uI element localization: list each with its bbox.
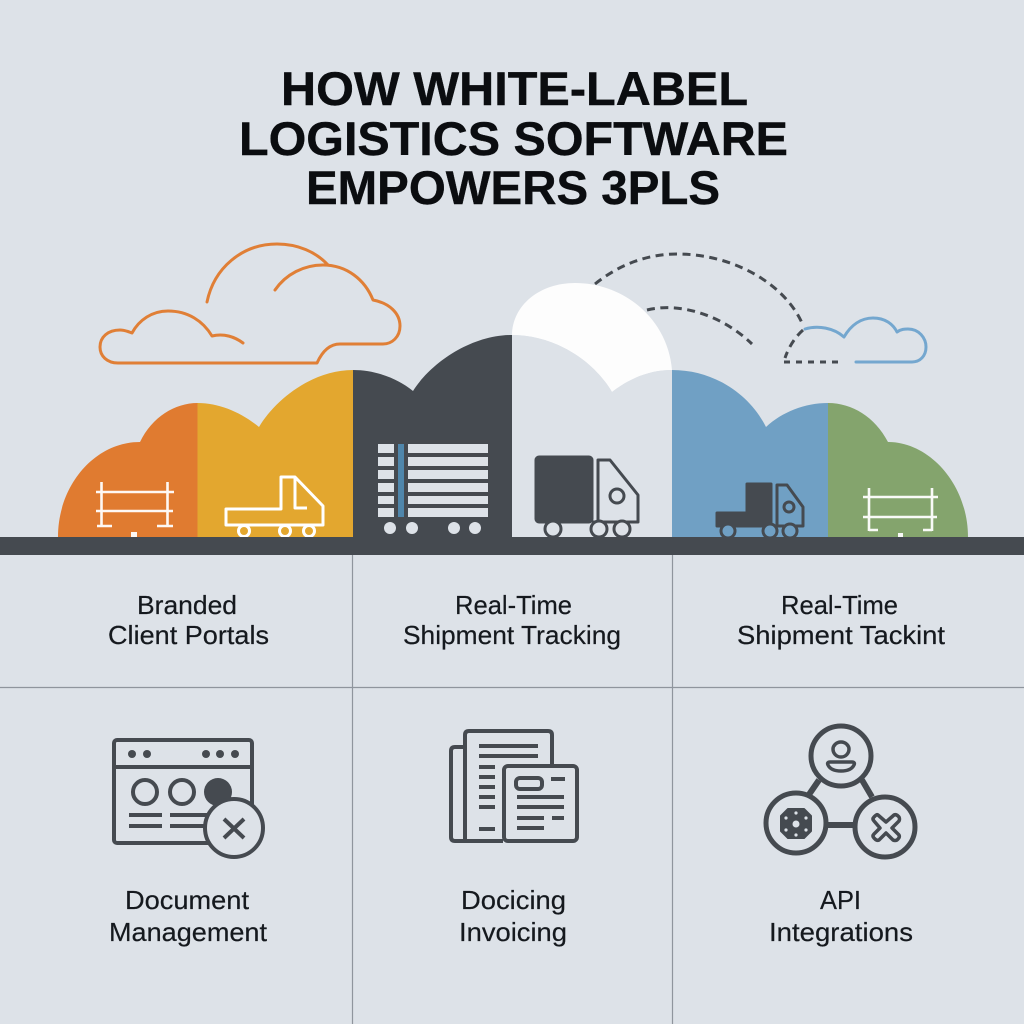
label: real-time shipment tracking: Shipment Tracking [403, 620, 621, 650]
dashed connection arcs [595, 254, 838, 362]
label: branded client portals: Client Portals [108, 620, 269, 650]
icon: striped container on wheels [378, 444, 488, 534]
orange outline cloud [100, 244, 400, 363]
grid lines [0, 555, 1024, 1024]
label: docicing invoicing [459, 885, 567, 947]
label: docicing invoicing: Invoicing [459, 917, 567, 947]
label: branded client portals [108, 590, 269, 650]
label: document management: Document [125, 885, 250, 915]
label: real-time shipment tackint: Shipment Tackint [737, 620, 946, 650]
skyline cloud: orange segment [58, 403, 198, 537]
skyline cloud: yellow segment [198, 370, 353, 537]
label: real-time shipment tracking [403, 590, 621, 650]
blue outline cloud [805, 318, 926, 362]
skyline cloud: light segment [512, 335, 672, 537]
label: docicing invoicing: Docicing [461, 885, 566, 915]
label: branded client portals: Branded [137, 590, 237, 620]
skyline cloud: dark segment [353, 335, 512, 537]
icon: grey box truck [536, 457, 638, 537]
label: real-time shipment tackint [737, 590, 946, 650]
label: api integrations: API [820, 885, 861, 915]
skyline cloud: blue segment [672, 370, 828, 537]
ground bar [0, 537, 1024, 555]
icon: api integrations network [766, 726, 915, 857]
icon: green scaffold [863, 488, 938, 537]
label: api integrations [769, 885, 913, 947]
label: document management [109, 885, 268, 947]
label: real-time shipment tackint: Real-Time [781, 590, 898, 620]
skyline cloud: green segment [828, 403, 968, 537]
title [239, 62, 788, 214]
icon: yellow flatbed truck [226, 477, 323, 536]
skyline cloud: white highlight [512, 283, 672, 392]
icon: orange scaffold [96, 482, 174, 537]
icon: small truck on blue [717, 484, 803, 538]
icon: stacked invoices [451, 731, 577, 841]
title: LOGISTICS SOFTWARE [239, 112, 788, 165]
title: HOW WHITE-LABEL [281, 62, 748, 115]
title: EMPOWERS 3PLS [306, 161, 720, 214]
label: api integrations: Integrations [769, 917, 913, 947]
label: real-time shipment tracking: Real-Time [455, 590, 572, 620]
label: document management: Management [109, 917, 268, 947]
icon: browser window with close badge [114, 740, 263, 857]
